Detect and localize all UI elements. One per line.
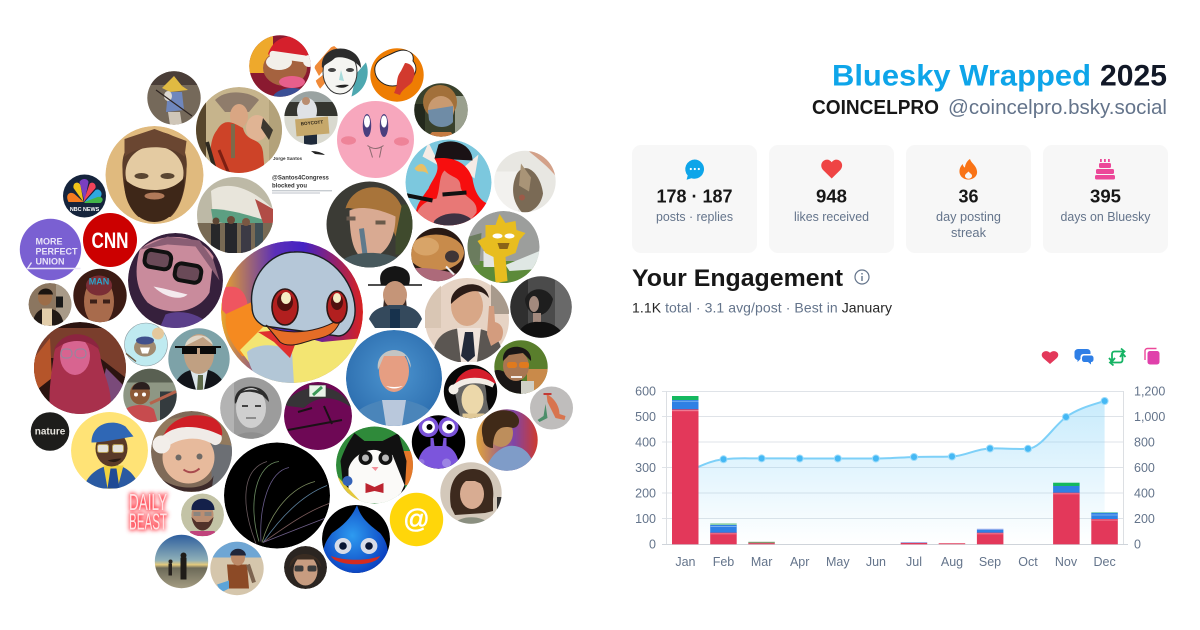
avatar: orange sketch figure on wall [530, 386, 573, 430]
panel: day posting streak [906, 145, 1031, 253]
avatar: man with mandarin hat [368, 266, 422, 328]
avatar: bearded man with glasses [106, 126, 204, 224]
avatar: child with Santa hat [151, 411, 234, 492]
More Perfect Union wordmark: MORE [36, 236, 62, 246]
month labels: Apr [790, 555, 809, 569]
avatar: yellow at-sign logo [390, 493, 443, 546]
avatar: yellow sun mascot [468, 211, 540, 283]
avatar: orange logo with red profile [370, 48, 424, 102]
month labels: Feb [713, 555, 734, 569]
avatar: woman with long red hair [34, 322, 126, 414]
left axis labels: 300 [635, 461, 656, 475]
month labels: Dec [1093, 555, 1116, 569]
icon: reposts arrows [1109, 348, 1126, 366]
avatar: person with mullet [440, 462, 502, 524]
avatar: Santa bear cartoon [249, 35, 311, 97]
panel: days on Bluesky: 395 [1090, 186, 1121, 206]
month labels: Jun [866, 555, 886, 569]
panel: likes received: 948 [816, 186, 847, 206]
title: 2025 [1100, 60, 1167, 92]
panel: posts and replies: posts · replies [656, 209, 733, 224]
icon: replies chat bubbles [1074, 349, 1094, 364]
avatar: More Perfect Union [20, 219, 81, 280]
engagement summary text: 1.1K total · 3.1 avg/post · Best in January [632, 300, 892, 316]
title: Bluesky Wrapped [832, 60, 1091, 92]
right axis labels: 200 [1134, 512, 1155, 526]
icon: birthday cake [1095, 159, 1115, 180]
icon: speech bubble [685, 160, 704, 180]
avatar: protester with sign [284, 91, 338, 145]
panel: day posting streak: streak [951, 225, 986, 240]
month labels: Oct [1018, 555, 1038, 569]
avatar: purple monster with eyes [412, 415, 466, 470]
month labels: Jul [906, 555, 922, 569]
avatar: nun with Santa hat [444, 364, 498, 420]
icon: quotes copy squares [1145, 348, 1160, 364]
gridlines and axes [662, 391, 1128, 544]
left axis labels [635, 384, 656, 552]
avatar: woman on beach [210, 542, 264, 596]
avatar: smiling man in blue suit [346, 330, 442, 426]
right axis labels: 1,200 [1134, 384, 1165, 398]
avatar: red haired horned character [402, 140, 492, 226]
bar: August [939, 543, 965, 544]
panel: likes received: likes received [794, 209, 869, 224]
avatar: renaissance painting piper [196, 87, 282, 174]
panel: days on Bluesky: days on Bluesky [1060, 209, 1151, 224]
bar: December [1091, 512, 1118, 544]
heading: Your Engagement: Your Engagement [632, 265, 843, 292]
avatar: black and white portrait [220, 377, 282, 439]
panel: likes received [769, 145, 894, 253]
right axis labels: 1,000 [1134, 410, 1165, 424]
avatar: NBC News logo [63, 174, 106, 218]
avatar: More Perfect Union: UNION [36, 256, 64, 266]
MAN wordmark: MAN [89, 276, 109, 286]
month labels: May [826, 555, 850, 569]
month labels: Sep [979, 555, 1001, 569]
avatar: old man with pixel sunglasses [168, 328, 230, 390]
avatar: Dragon Quest slime [322, 505, 390, 573]
month labels: Mar [751, 555, 772, 569]
avatar: woman in dark room [510, 276, 573, 338]
avatar: sleeping golden dog [408, 228, 465, 282]
line data points [720, 398, 1108, 463]
right axis labels: 600 [1134, 461, 1155, 475]
month labels [675, 555, 1116, 569]
avatar: businessman pointing finger [425, 278, 509, 362]
right axis labels: 800 [1134, 436, 1155, 450]
left axis labels: 100 [635, 512, 656, 526]
panel: day posting streak: 36 [958, 186, 978, 206]
avatar: MAN bald poster [73, 268, 127, 326]
chart: monthly engagement bars and cumulative line [635, 384, 1165, 569]
avatar: More Perfect Union: PERFECT [36, 246, 78, 256]
sign text: BOYCOTT [301, 119, 324, 126]
avatar: woman with finger on lips [326, 181, 414, 268]
month labels: Nov [1055, 555, 1078, 569]
icon: heart [821, 160, 842, 178]
tweet screenshot avatar: blocked you [272, 184, 307, 190]
avatar: man taking mirror selfie [28, 282, 72, 326]
chart legend icons [1042, 348, 1160, 366]
panel: posts and replies: 178 · 187 [656, 186, 732, 206]
bar: February [710, 523, 737, 544]
NBC News wordmark: NBC NEWS [70, 207, 100, 213]
right axis labels: 400 [1134, 486, 1155, 500]
avatar: drawn face with dark hair [314, 45, 368, 99]
avatar: black with generative coloured lines [224, 442, 330, 548]
left axis labels: 600 [635, 384, 656, 398]
bar: September [977, 529, 1003, 544]
Daily Beast neon logo: DAILY [129, 489, 167, 515]
CNN wordmark: CNN [92, 228, 128, 253]
icon: info [855, 270, 869, 284]
avatar: CNN logo [83, 213, 137, 267]
cumulative line [685, 401, 1105, 472]
left axis labels: 0 [649, 538, 656, 552]
avatar: man with orange sunglasses [494, 340, 549, 395]
right axis labels: 0 [1134, 538, 1141, 552]
avatar: curly haired person in blue shirt [476, 409, 538, 471]
Daily Beast neon logo [129, 489, 167, 534]
avatar: gnome with yellow hat [147, 71, 201, 125]
left axis labels: 400 [635, 436, 656, 450]
panel: day posting streak: day posting [936, 209, 1001, 224]
icon: flame [959, 159, 977, 180]
icon: likes heart [1042, 351, 1058, 364]
profile name and handle: @coincelpro.bsky.social [948, 97, 1167, 119]
panel: posts and replies [632, 145, 757, 253]
avatar: curly hair man with mask [413, 83, 469, 138]
left axis labels: 200 [635, 486, 656, 500]
bar: January [672, 396, 698, 544]
avatar: cartoon cat with bow tie [336, 426, 414, 504]
avatar: cartoon man with blue cap [71, 412, 148, 489]
avatar: bearded man with cap [181, 494, 224, 536]
avatar: sunset silhouettes at beach [154, 534, 208, 588]
nature wordmark: nature [35, 426, 66, 438]
avatar: man with glasses [284, 546, 327, 589]
panel: days on Bluesky [1043, 145, 1168, 253]
tweet screenshot avatar: @Santos4Congress [272, 176, 330, 182]
avatar bubble cluster: BEAST [129, 508, 167, 534]
avatar: smiling man with black glasses [128, 233, 223, 328]
bar: November [1053, 483, 1080, 544]
avatar: cat being petted [494, 150, 557, 214]
Daily Beast neon logo: BEAST [129, 508, 167, 534]
avatar: Nature logo [31, 412, 69, 451]
month labels: Jan [675, 555, 696, 569]
stacked bars [672, 396, 1118, 544]
tweet screenshot avatar [272, 151, 332, 194]
avatar: crowd with flag [197, 177, 273, 253]
bar: March [748, 542, 775, 544]
tweet screenshot avatar: Jorge Santos [273, 156, 303, 161]
right axis labels [1134, 384, 1165, 552]
avatar: beret cartoon bird [124, 323, 168, 366]
avatar: cartoon woman at station [123, 368, 177, 424]
profile name and handle: COINCELPRO [812, 97, 939, 119]
avatar: Squirtle [221, 241, 364, 387]
at sign: @ [403, 504, 430, 534]
Daily Beast neon logo: DAILY [129, 489, 167, 515]
profile name and handle [812, 97, 1167, 119]
avatar: Kirby [337, 101, 414, 178]
left axis labels: 500 [635, 410, 656, 424]
bar: July [901, 542, 927, 544]
avatar bubble cluster [20, 35, 573, 596]
avatar: purple cartoon with hat [284, 382, 352, 450]
month labels: Aug [941, 555, 963, 569]
cumulative area [685, 401, 1105, 544]
